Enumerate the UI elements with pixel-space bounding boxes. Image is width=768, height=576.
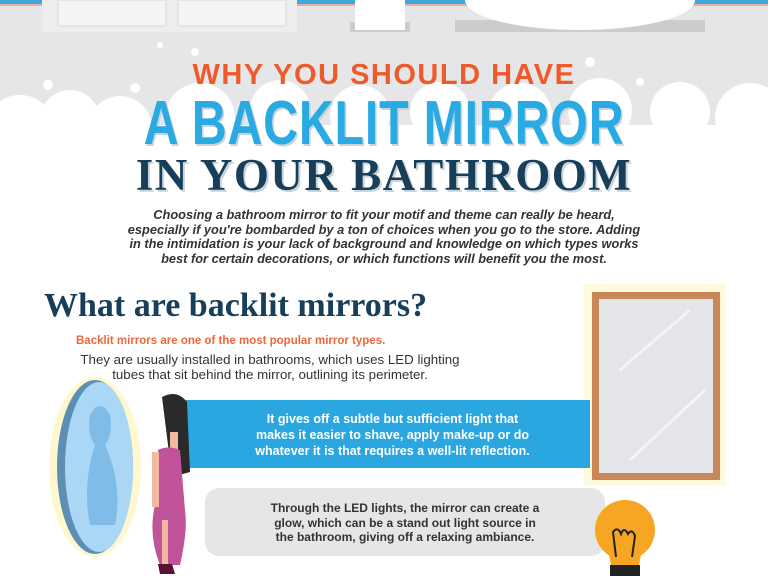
grey speech bubble: Through the LED lights, the mirror can create a bbox=[271, 501, 539, 515]
blue callout band: makes it easier to shave, apply make-up or do bbox=[256, 428, 529, 442]
intro paragraph: especially if you're bombarded by a ton of choices when you go to the store. Adding bbox=[128, 222, 640, 236]
icon: light bulb bbox=[595, 500, 655, 576]
intro paragraph: best for certain decorations, or which functions will benefit you the most. bbox=[161, 250, 607, 266]
title line 2: A BACKLIT MIRROR bbox=[144, 89, 624, 158]
blue callout band: whatever it is that requires a well-lit reflection. bbox=[255, 444, 530, 458]
section heading: What are backlit mirrors? bbox=[44, 287, 427, 324]
title line 3: IN YOUR BATHROOM bbox=[136, 150, 632, 200]
intro paragraph: Choosing a bathroom mirror to fit your motif and theme can really be heard, bbox=[153, 207, 615, 222]
illustration: wall mirror bbox=[584, 284, 726, 486]
title line 1: WHY YOU SHOULD HAVE bbox=[192, 59, 576, 91]
intro paragraph: in the intimidation is your lack of background and knowledge on which types works bbox=[129, 236, 639, 251]
description text: tubes that sit behind the mirror, outlining its perimeter. bbox=[112, 367, 428, 382]
orange subtitle: Backlit mirrors are one of the most popular mirror types. bbox=[76, 335, 385, 347]
blue callout band bbox=[185, 400, 590, 468]
grey speech bubble: glow, which can be a stand out light source in bbox=[274, 516, 536, 530]
blue callout band: It gives off a subtle but sufficient light that bbox=[267, 412, 518, 426]
description text bbox=[80, 352, 460, 382]
intro paragraph bbox=[128, 207, 640, 266]
illustration: woman bbox=[152, 394, 190, 574]
illustration: oval mirror bbox=[49, 377, 141, 557]
description text: They are usually installed in bathrooms, which uses LED lighting bbox=[80, 352, 460, 367]
grey speech bubble: the bathroom, giving off a relaxing ambiance. bbox=[276, 530, 534, 544]
grey speech bubble bbox=[205, 488, 605, 556]
